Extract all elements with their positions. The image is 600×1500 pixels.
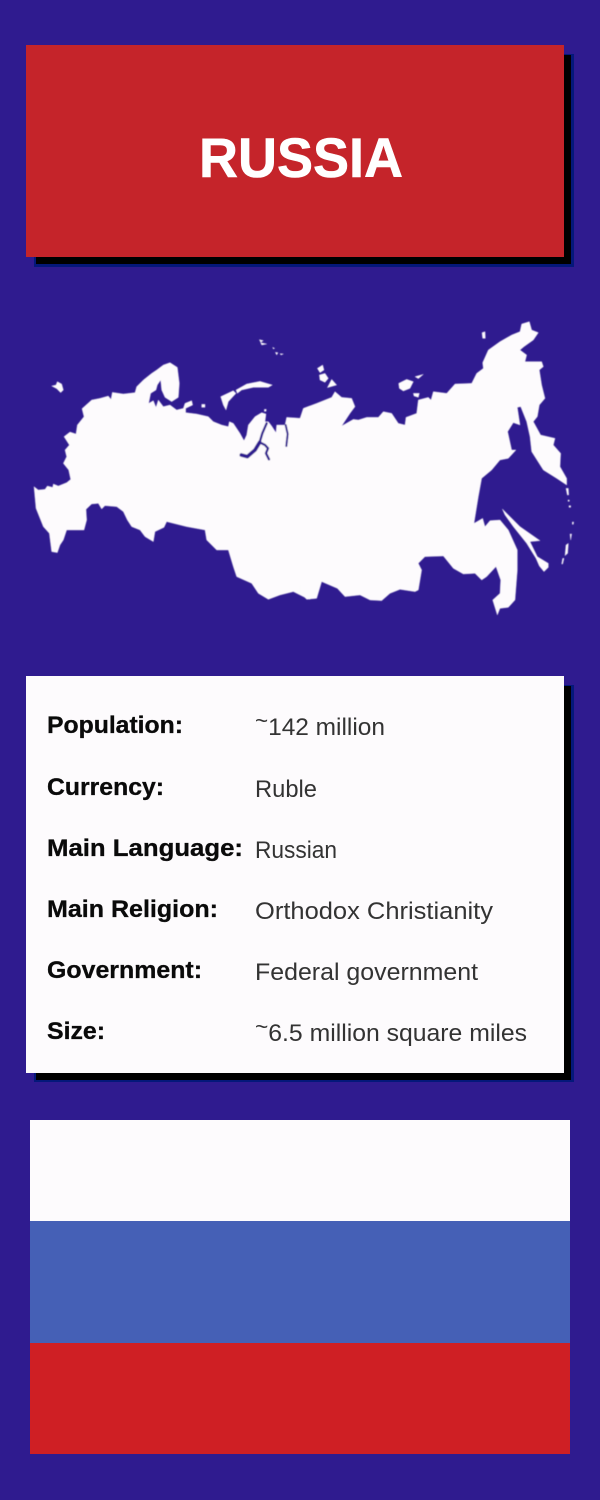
row: main religion (47, 896, 493, 925)
row: currency: Currency: (47, 774, 164, 801)
row: size: 6.5 million square miles (268, 1020, 527, 1047)
row: size: ~ (255, 1014, 268, 1039)
facts card (26, 676, 574, 1082)
row: main religion: Orthodox Christianity (255, 898, 493, 925)
row: main religion: Main Religion: (47, 896, 218, 923)
row: currency (47, 774, 317, 803)
row: main language (47, 835, 337, 864)
row: population (47, 708, 385, 741)
Ob gulf inlet (241, 423, 288, 459)
row: government: Government: (47, 957, 202, 984)
row: size: Size: (47, 1018, 105, 1045)
row: government (47, 957, 478, 986)
row: population: 142 million (268, 714, 385, 741)
row: government: Federal government (255, 959, 478, 986)
title banner (26, 45, 574, 267)
row: main language: Russian (255, 837, 337, 864)
row: main language: Main Language: (47, 835, 243, 862)
row: currency: Ruble (255, 776, 317, 803)
row: population: ~ (255, 708, 268, 733)
row: population: Population: (47, 712, 183, 739)
title: RUSSIA (199, 126, 403, 189)
map of Russia (34, 322, 574, 615)
Russian flag (30, 1120, 570, 1454)
row: size (47, 1014, 527, 1047)
